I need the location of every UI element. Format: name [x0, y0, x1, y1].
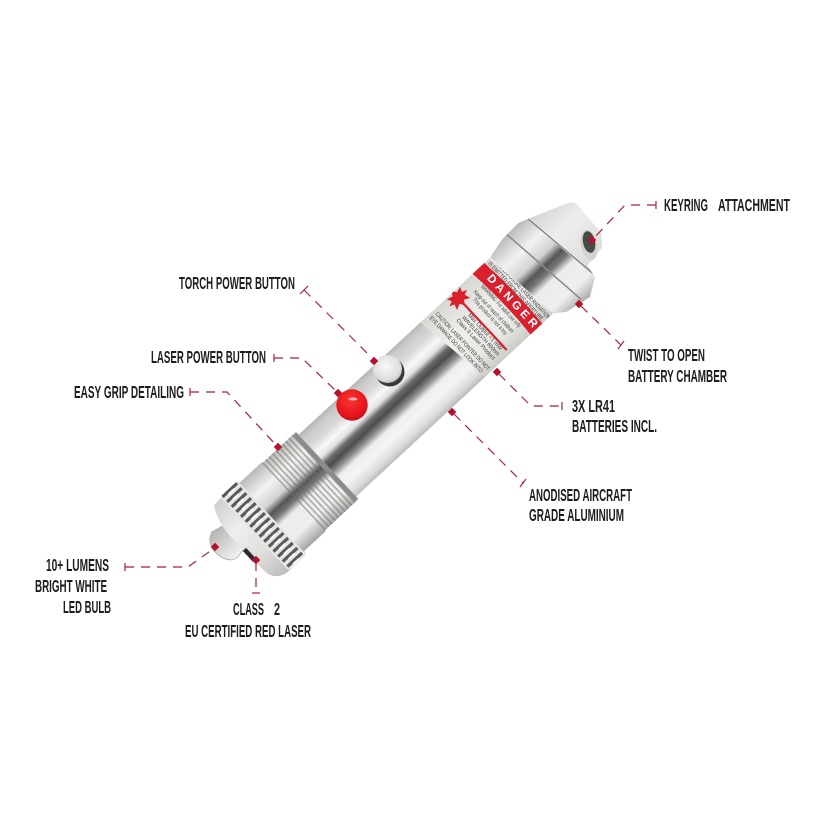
class line: Class II Laser Product	[455, 318, 496, 362]
main body tube	[299, 315, 485, 497]
label: aluminium: ANODISED AIRCRAFT	[529, 485, 632, 505]
warning label	[420, 258, 553, 377]
not a toy line: This product is not a toy	[471, 297, 508, 337]
leader: twist to open	[575, 300, 624, 349]
label: LED bulb: 10+ LUMENS	[46, 555, 109, 575]
laser power button	[336, 389, 368, 421]
threaded grip	[261, 432, 359, 531]
leader: aluminium	[448, 408, 526, 487]
front cap	[207, 495, 292, 584]
label: twist to open: BATTERY CHAMBER	[628, 366, 727, 386]
warning line: WARNING: For adult use only	[479, 284, 522, 329]
leader: laser power button	[274, 354, 342, 397]
leader: batteries	[493, 368, 562, 410]
label: twist to open: TWIST TO OPEN	[628, 345, 705, 365]
smooth grip band	[240, 462, 326, 552]
leader: red laser	[252, 556, 260, 593]
label: LED bulb: LED BULB	[63, 597, 111, 617]
eye damage line: EYE DAMAGE DO NOT LOOK INTO	[428, 316, 484, 375]
label: red laser: EU CERTIFIED RED LASER	[185, 621, 311, 641]
leader: easy grip	[190, 388, 282, 451]
output line: Max Output <1 mW	[466, 313, 504, 352]
label: batteries	[572, 396, 657, 436]
label: keyring attachment: KEYRING	[664, 195, 708, 215]
red danger band	[472, 261, 544, 336]
label: red laser: CLASS	[233, 599, 264, 619]
keep away line: Keep out of reach of children	[472, 290, 514, 335]
cap edge	[528, 218, 593, 274]
caution line: CAUTION: LASER POINTER DO NOT	[434, 312, 491, 372]
aperture warning text: AVOID EXPOSURE LASER RADIATION	[491, 257, 551, 321]
lens bulb	[204, 523, 246, 566]
knurled ring	[220, 480, 307, 571]
label: batteries: 3X LR41	[572, 396, 615, 416]
twist ring	[490, 219, 594, 313]
label: red laser	[185, 599, 311, 641]
label: torch power button: TORCH POWER BUTTON	[179, 273, 295, 293]
keyring hole	[578, 228, 600, 262]
leader: keyring	[588, 201, 656, 244]
label: aluminium	[529, 485, 632, 525]
label: batteries: BATTERIES INCL.	[572, 416, 657, 436]
label: easy grip detailing: EASY GRIP DETAILING	[74, 382, 184, 402]
ring groove	[506, 234, 582, 300]
label: laser power button: LASER POWER BUTTON	[151, 347, 266, 367]
leader: LED bulb	[125, 543, 219, 571]
red rule	[462, 302, 508, 351]
red burst	[447, 287, 470, 310]
laser aperture	[243, 548, 256, 562]
label: LED bulb: BRIGHT WHITE	[35, 576, 107, 596]
leader: torch power button	[300, 286, 378, 365]
label: red laser: 2	[274, 599, 280, 619]
rear twist cap and keyring	[490, 202, 602, 314]
label: LED bulb	[35, 555, 111, 617]
laser torch product	[210, 202, 602, 576]
label: aluminium: GRADE ALUMINIUM	[529, 505, 624, 525]
torch power button	[373, 355, 404, 386]
wavelength line: WAVELENGTH 650nm	[460, 315, 500, 358]
label: twist to open	[628, 345, 727, 386]
emitted text: IS EMITTED FROM THIS APERTURE	[486, 261, 544, 322]
danger text: DANGER	[484, 272, 540, 331]
label: keyring attachment	[664, 195, 790, 215]
